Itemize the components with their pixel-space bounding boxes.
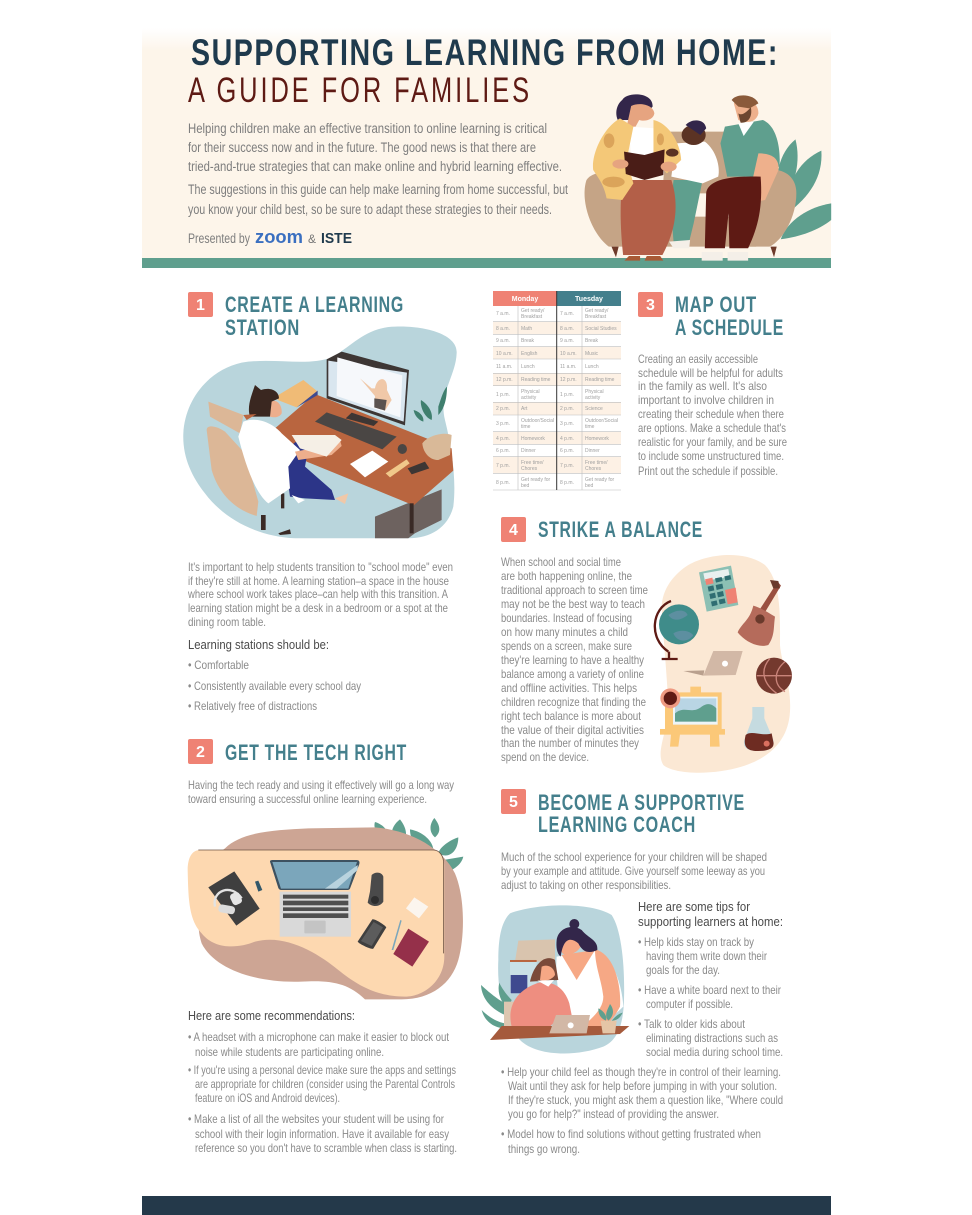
schedule table: 2 p.m. [496,406,510,412]
schedule table: time [585,424,595,430]
bullet list: further tips: If they're stuck, you might ask them a question like, "Where could [508,1093,783,1107]
schedule table: 7 p.m. [560,463,574,469]
tips heading [638,899,783,929]
schedule table: 11 a.m. [560,364,576,370]
daughter [530,958,558,982]
schedule table: activity [585,395,601,401]
schedule table: Get ready for [585,477,615,483]
schedule table: English [521,351,538,357]
plant [422,434,452,460]
text: learning station description: where school work takes place–can help with this transition. A [187,587,448,601]
intro text [188,121,568,217]
schedule table: Monday [512,296,538,303]
bullet list: recommendations: school with their login information. Have it available for easy [195,1127,449,1141]
calculator [699,566,738,612]
bullet list: tips: • Help kids stay on track by [638,935,754,949]
child [672,180,703,242]
heading 4: STRIKE A BALANCE [538,517,703,542]
schedule table: Free time/ [521,460,544,466]
schedule table: time [521,424,531,430]
bullet list: further tips: things go wrong. [508,1142,580,1156]
tips heading: Here are some tips for [638,899,751,914]
badge 3: 3 [646,297,655,314]
bullet list: recommendations: feature on iOS and Android devices). [195,1091,340,1105]
laptop [270,860,360,890]
schedule table: Get ready/ [521,308,545,314]
text: learning station description: dining room table. [188,615,266,629]
bullet list: recommendations: • Make a list of all the websites your student will be using for [188,1112,444,1126]
text: balance: they're learning to have a healthy [501,653,644,667]
bullet list: tips: goals for the day. [646,963,720,977]
text: schedule: in the family as well. It's also [638,379,767,393]
text: schedule: realistic for your family, and be sure [638,435,787,449]
guitar [738,580,781,646]
bullet list: further tips: you go for help?" instead of providing the answer. [508,1107,719,1121]
schedule table: Art [521,406,528,412]
badge 2: 2 [196,744,205,761]
presented by logos: & [308,232,316,246]
text: schedule: creating their schedule when there [638,407,784,421]
basketball [756,658,792,694]
books [278,380,318,407]
illustration: learning station [183,327,457,538]
schedule table: Lunch [585,364,599,370]
bullet list: further tips: Wait until they ask for help before jumping in with your solution. [508,1079,777,1093]
footer band [142,1196,831,1215]
text: balance: When school and social time [501,555,621,569]
text: learning station description: It's important to help students transition to "school mode" even [188,560,453,574]
intro text: Helping children make an effective transition to online learning is critical [188,121,547,136]
bullet list: tips: • Talk to older kids about [638,1017,746,1031]
text: learning station description [187,560,453,629]
bullet list: learning stations: • Relatively free of distractions [188,699,317,713]
heading 3 [675,292,784,340]
heading 1 [225,292,404,340]
schedule table: bed [521,483,530,489]
monitor [327,352,409,425]
text: balance [501,555,648,764]
text: balance: spends on a screen, make sure [501,639,632,653]
teal band [142,258,831,268]
text: tech intro: toward ensuring a successful online learning experience. [188,792,427,806]
text: schedule: to include some unstructured time. [638,449,784,463]
intro text: tried-and-true strategies that can make online and hybrid learning effective. [188,159,562,174]
section 1: create a learning station [183,292,457,713]
illustration: desk from above [188,818,463,999]
presented by logos: zoom [255,227,303,247]
text: schedule: schedule will be helpful for adults [638,366,783,380]
section 2: get the tech right [188,739,463,1155]
title: SUPPORTING LEARNING FROM HOME: [191,32,779,73]
globe [655,601,699,659]
bullet list: recommendations [188,1030,457,1155]
schedule table: Break [585,338,599,344]
schedule table: 7 p.m. [496,463,510,469]
badge 2 [188,739,213,764]
schedule table: Homework [585,436,609,442]
tablet [549,1015,590,1033]
badge 3 [638,292,663,317]
badge 4 [501,517,526,542]
illustration: family on sofa [585,94,831,261]
bullet list: tips [638,935,783,1059]
schedule table: Free time/ [585,460,608,466]
bullet list: tips: social media during school time. [646,1045,783,1059]
phone [358,919,386,949]
text: learning station description: if they're still at home. A learning station–a space in the house [188,574,449,588]
schedule table: 1 p.m. [560,392,574,398]
schedule table: Outdoor/Social [585,418,618,424]
tablet with headphones [208,871,260,926]
bullet list: recommendations: • A headset with a microphone can make it easier to block out [188,1030,450,1044]
text: balance: right tech balance is more about [501,709,642,723]
schedule table: 12 p.m. [496,377,513,383]
schedule table: 8 a.m. [496,326,510,332]
heading 5 [538,790,745,837]
chair [208,402,243,433]
schedule table: 3 p.m. [496,421,510,427]
man [720,120,780,177]
schedule table: Music [585,351,599,357]
schedule table: 10 a.m. [496,351,513,357]
text: schedule: important to involve children in [638,393,774,407]
schedule table: activity [521,395,537,401]
schedule table: Breakfast [585,314,607,320]
tips heading: supporting learners at home: [638,914,783,929]
heading 1: STATION [225,315,300,340]
heading 3: MAP OUT [675,292,757,317]
keyboard [315,412,397,449]
text: balance: balance among a variety of online [501,667,644,681]
schedule table: Lunch [521,364,535,370]
notebook [393,929,429,967]
text: balance: are both happening online, the [501,569,632,583]
intro text: you know your child best, so be sure to adapt these strategies to their needs. [188,202,552,217]
bullet list: tips: • Have a white board next to their [638,983,781,997]
text: balance: spend on the device. [501,750,589,764]
presented by logos: Presented by [188,231,250,246]
schedule table: Get ready/ [585,308,609,314]
text: schedule: Print out the schedule if possible. [638,464,778,478]
bullet list: recommendations: are appropriate for children (consider using the Parental Controls [195,1077,455,1091]
schedule table: Dinner [521,448,536,454]
panel: header [142,28,831,268]
text: balance: traditional approach to screen time [501,583,648,597]
laptop [683,651,743,676]
text: coach intro: by your example and attitude. Give yourself some leeway as you [501,864,765,878]
heading 5: BECOME A SUPPORTIVE [538,790,745,815]
text: schedule [638,352,787,478]
note [406,897,428,918]
section 5: supportive learning coach [481,789,783,1156]
text: tech intro: Having the tech ready and using it effectively will go a long way [188,778,454,792]
text: balance: the value of their digital activities [501,723,644,737]
text: tech intro [188,778,454,806]
schedule table: 4 p.m. [496,436,510,442]
schedule table: 9 a.m. [496,338,510,344]
schedule table: Breakfast [521,314,543,320]
person [285,441,335,500]
badge 5: 5 [509,794,518,811]
schedule table: bed [585,483,594,489]
easel [660,687,725,747]
pen [392,920,402,950]
illustration: parent and child [481,905,629,1053]
text: balance: and offline activities. This helps [501,681,637,695]
woman [621,180,676,255]
section 3: map out a schedule [638,292,787,478]
bullet list: learning stations: • Consistently available every school day [188,679,361,693]
schedule table: Physical [585,389,604,395]
section 4: strike a balance [501,517,792,773]
schedule table: Math [521,326,532,332]
schedule table: Chores [585,466,602,472]
intro text: for their success now and in the future. The good news is that there are [188,140,536,155]
schedule table: 8 p.m. [496,480,510,486]
bullet list: tips: eliminating distractions such as [646,1031,778,1045]
subheading: recommendations: Here are some recommendations: [188,1008,355,1023]
schedule table: 7 a.m. [496,311,510,317]
presented by logos: ISTE [321,230,352,247]
presented by logos [188,227,352,247]
bullet list: recommendations: reference so you don't have to scramble when class is starting. [195,1141,457,1155]
schedule table: 7 a.m. [560,311,574,317]
schedule table: 8 p.m. [560,480,574,486]
subheading: learning stations: Learning stations should be: [188,637,329,652]
schedule table: 6 p.m. [560,448,574,454]
heading 5: LEARNING COACH [538,812,696,837]
text: balance: on how many minutes a child [501,625,628,639]
text: coach intro [501,850,767,892]
small plant [601,1021,617,1033]
schedule table: Outdoor/Social [521,418,554,424]
schedule table: Tuesday [575,296,603,303]
bullet list: further tips [501,1065,783,1156]
text: balance: boundaries. Instead of focusing [501,611,632,625]
text: schedule: Creating an easily accessible [638,352,758,366]
text: balance: children recognize that finding the [501,695,646,709]
illustration: balance activities [655,555,792,773]
schedule table: Reading time [585,377,615,383]
bullet list: tips: computer if possible. [646,997,733,1011]
schedule table: 8 a.m. [560,326,574,332]
flask [744,707,774,751]
schedule table: Homework [521,436,545,442]
schedule table: 4 p.m. [560,436,574,442]
schedule table: 10 a.m. [560,351,577,357]
schedule table: 12 p.m. [560,377,577,383]
text: coach intro: Much of the school experience for your children will be shaped [501,850,767,864]
table [490,1026,629,1040]
badge 1 [188,292,213,317]
bullet list: further tips: • Help your child feel as though they're in control of their learning. [501,1065,781,1079]
text: coach intro: adjust to taking on other responsibilities. [501,878,671,892]
subtitle: A GUIDE FOR FAMILIES [188,71,532,110]
schedule table: Break [521,338,535,344]
bullet list: learning stations [188,658,361,713]
schedule table: Physical [521,389,540,395]
intro text: The suggestions in this guide can help make learning from home successful, but [188,182,568,197]
schedule table: 3 p.m. [560,421,574,427]
heading 2: GET THE TECH RIGHT [225,740,407,765]
heading 1: CREATE A LEARNING [225,292,404,317]
schedule table: 6 p.m. [496,448,510,454]
schedule table: 2 p.m. [560,406,574,412]
badge 1: 1 [196,297,205,314]
mother [556,950,623,1028]
microphone [368,873,383,906]
bullet list: learning stations: • Comfortable [188,658,249,672]
schedule table: Science [585,406,603,412]
schedule table: 11 a.m. [496,364,512,370]
heading 3: A SCHEDULE [675,315,784,340]
schedule table: Dinner [585,448,600,454]
schedule table: Chores [521,466,538,472]
schedule table: Social Studies [585,326,617,332]
text: balance: may not be the best way to teach [501,597,645,611]
badge 5 [501,789,526,814]
schedule table: 9 a.m. [560,338,574,344]
schedule table: Reading time [521,377,551,383]
text: balance: than the number of minutes they [501,736,639,750]
schedule table: 1 p.m. [496,392,510,398]
bullet list: further tips: • Model how to find solutions without getting frustrated when [501,1127,761,1141]
badge 4: 4 [509,522,518,539]
bullet list: recommendations: noise while students are participating online. [195,1045,384,1059]
schedule table [493,291,621,490]
schedule table: Get ready for [521,477,551,483]
text: schedule: are options. Make a schedule that's [638,421,786,435]
text: learning station description: learning station might be a desk in a bedroom or a spot at the [188,601,448,615]
bullet list: tips: having them write down their [646,949,767,963]
bullet list: recommendations: • If you're using a personal device make sure the apps and settings [188,1063,456,1077]
